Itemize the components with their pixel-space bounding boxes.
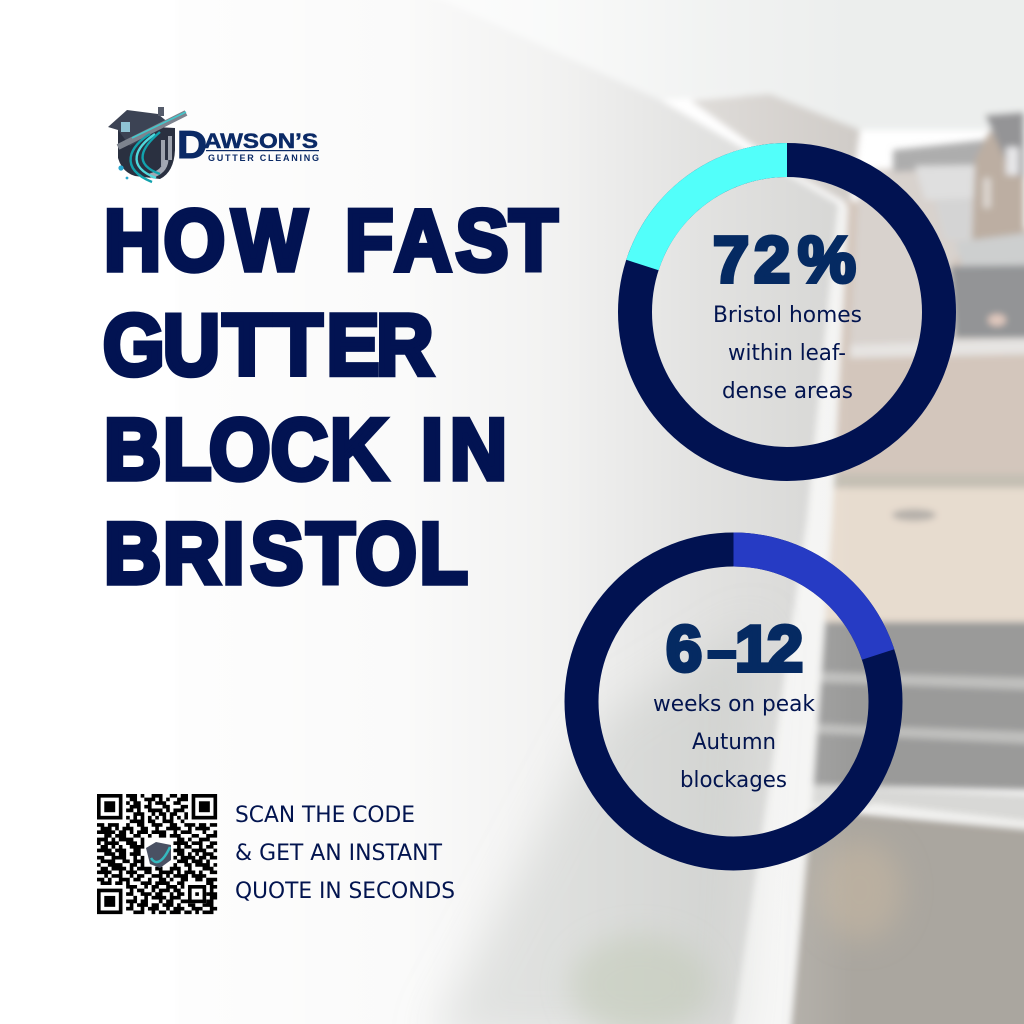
label: weeks on peak Autumn blockages: Autumn	[692, 729, 776, 755]
big stat 72%: 72%	[713, 223, 856, 296]
logo wordmark: AWSON’S	[204, 130, 318, 153]
donut chart: 6-12 weeks	[582, 550, 886, 854]
QR code	[97, 796, 217, 912]
label: weeks on peak Autumn blockages: blockages	[680, 767, 787, 793]
call to action: & GET AN INSTANT	[235, 840, 442, 866]
label: Bristol homes within leaf-dense areas: within leaf-	[728, 340, 846, 366]
cyan segment	[642, 160, 787, 265]
logo wordmark	[177, 124, 319, 167]
label: weeks on peak Autumn blockages	[653, 691, 815, 793]
logo wordmark: GUTTER CLEANING	[208, 153, 319, 163]
call to action	[235, 802, 455, 904]
call to action: QUOTE IN SECONDS	[235, 878, 455, 904]
logo wordmark: D	[177, 124, 207, 167]
title: BLOCK IN	[104, 401, 507, 498]
big stat 6–12: 6	[666, 612, 702, 685]
icon: house with gutter and water	[108, 107, 186, 182]
blue segment	[734, 550, 878, 655]
donut chart: 72%	[635, 160, 939, 464]
QR centre logo	[146, 842, 171, 868]
call to action: SCAN THE CODE	[235, 802, 415, 828]
label: Bristol homes within leaf-dense areas: dense areas	[722, 378, 853, 404]
title: HOW FAST	[104, 192, 558, 289]
label: Bristol homes within leaf-dense areas	[713, 302, 862, 404]
label: weeks on peak Autumn blockages: weeks on peak	[653, 691, 815, 717]
big stat 6–12: 12	[735, 612, 803, 685]
title: BRISTOL	[104, 505, 468, 602]
title: GUTTER	[103, 296, 433, 393]
label: Bristol homes within leaf-dense areas: Bristol homes	[713, 302, 862, 328]
title	[103, 192, 558, 602]
shading: mossy lower gutter area	[430, 620, 760, 1024]
logo: Dawson's Gutter Cleaning	[108, 107, 319, 182]
big stat 6–12: –	[708, 623, 736, 679]
